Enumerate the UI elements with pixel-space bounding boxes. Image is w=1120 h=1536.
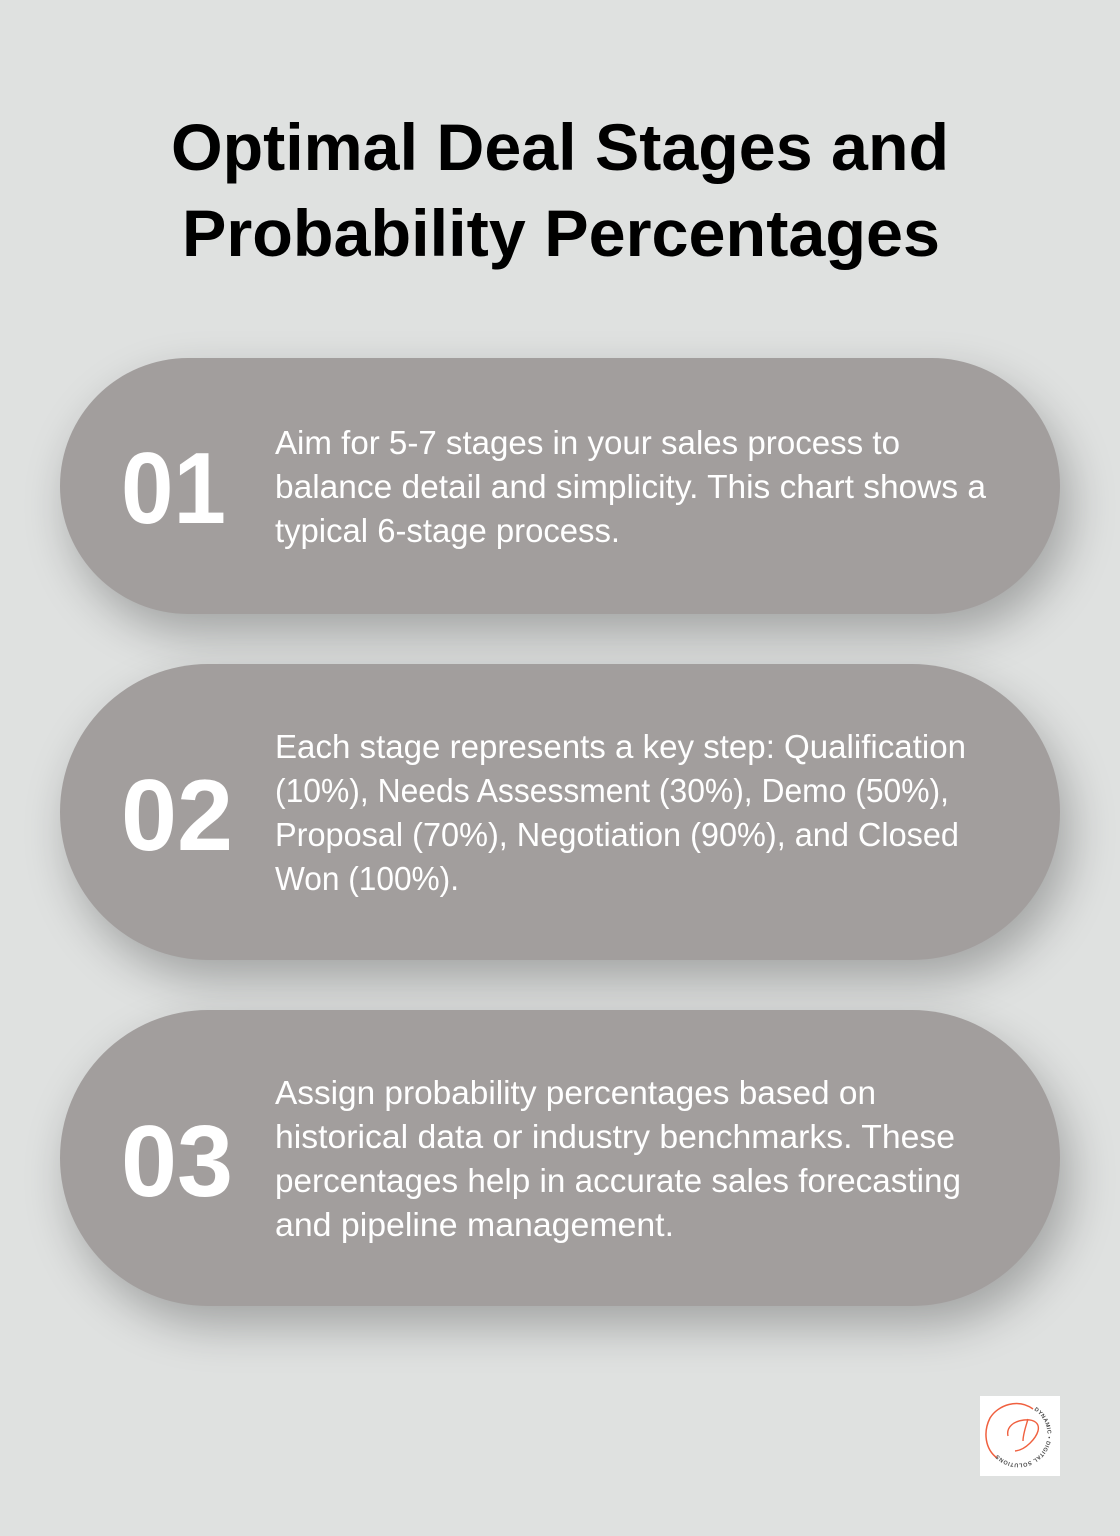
- step 03 text: percentages help in accurate sales forecasting: [275, 1162, 961, 1199]
- step 02 text: (10%), Needs Assessment (30%), Demo (50%),: [275, 772, 949, 809]
- icon: Dynamic Digital Solutions logo: [980, 1396, 1060, 1476]
- title: Optimal Deal Stages and: [171, 110, 949, 184]
- step 01 text: Aim for 5-7 stages in your sales process to: [275, 424, 900, 461]
- step 02 text: [275, 728, 966, 897]
- logo circular text: DYNAMIC • DIGITAL SOLUTIONS: [996, 1407, 1052, 1468]
- step 03 text: Assign probability percentages based on: [275, 1074, 876, 1111]
- step 03 text: historical data or industry benchmarks. These: [275, 1118, 955, 1155]
- step number 03: 03: [121, 1106, 233, 1218]
- title: [171, 110, 949, 270]
- step 02 text: Won (100%).: [275, 860, 459, 897]
- title: Probability Percentages: [182, 196, 940, 270]
- panel: step 01: [60, 358, 1060, 614]
- step number 01: 01: [121, 433, 226, 545]
- step 02 text: Each stage represents a key step: Qualification: [275, 728, 966, 765]
- panel: step 02: [60, 664, 1060, 960]
- logo ring: [986, 1404, 1033, 1458]
- logo monogram: [1008, 1419, 1038, 1451]
- step 01 text: [275, 424, 987, 549]
- step 03 text: [275, 1074, 961, 1243]
- step 01 text: balance detail and simplicity. This chart shows a: [275, 468, 987, 505]
- step number 02: 02: [121, 760, 233, 872]
- step 01 text: typical 6-stage process.: [275, 512, 620, 549]
- step 02 text: Proposal (70%), Negotiation (90%), and Closed: [275, 816, 959, 853]
- step 03 text: and pipeline management.: [275, 1206, 674, 1243]
- panel: step 03: [60, 1010, 1060, 1306]
